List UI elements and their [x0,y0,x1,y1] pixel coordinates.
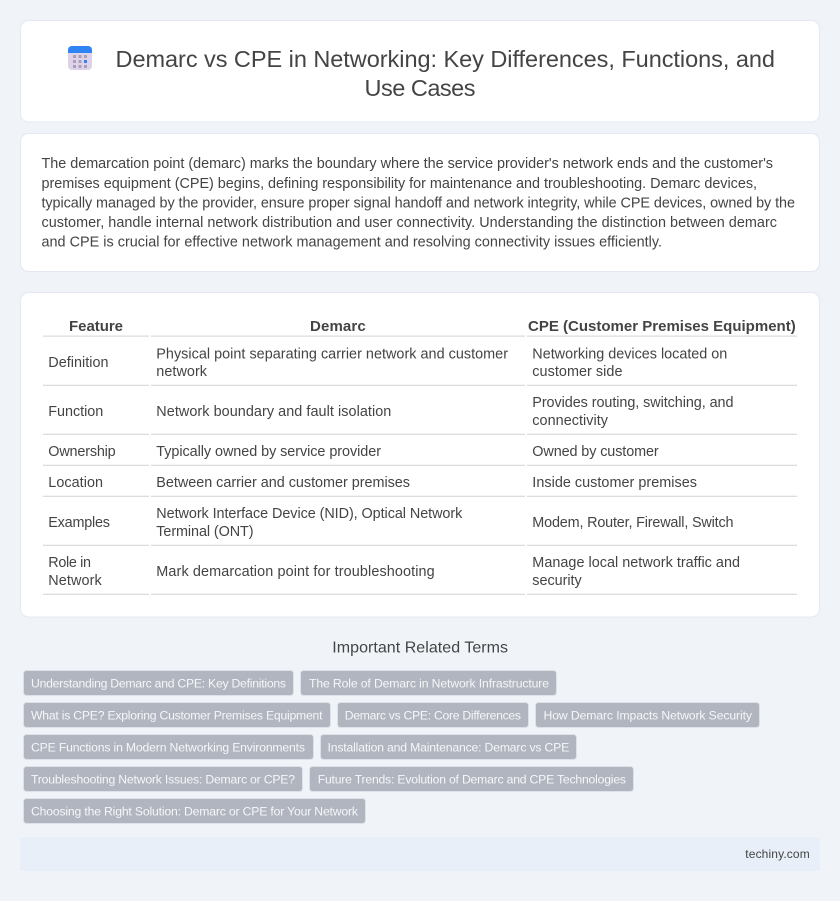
title [116,46,775,101]
table row: definition: network [156,364,208,380]
title: Demarc vs CPE in Networking: Key Differences, Functions, and [116,46,775,72]
table header row: Demarc [310,318,366,335]
table row: examples: Modem, Router, Firewall, Switch [532,515,734,531]
intro paragraph [42,156,795,250]
intro paragraph: The demarcation point (demarc) marks the boundary where the service provider's network ends and the customer's [42,156,773,172]
chip [24,670,294,696]
chip: The Role of Demarc in Network Infrastructure [309,676,549,690]
table row: location [43,475,797,497]
table row: function: Function [48,404,103,420]
table row: ownership: Typically owned by service provider [156,444,381,460]
footer bar: techiny.com [745,847,810,861]
chip [338,702,528,728]
table row: role in network: Manage local network traffic and [532,555,740,571]
chip [24,702,330,728]
chip [24,734,314,760]
chip [24,766,302,792]
panel: comparison table [20,292,820,617]
chip: Installation and Maintenance: Demarc vs CPE [328,740,569,754]
intro paragraph: and CPE is crucial for effective network management and resolving connectivity issues efficiently. [42,234,662,250]
chip: How Demarc Impacts Network Security [544,708,753,722]
icon: calendar [68,46,92,70]
table row: role in network: Mark demarcation point for troubleshooting [156,564,435,580]
table row: definition: customer side [532,364,622,380]
table row: function: Provides routing, switching, and [532,395,734,411]
intro paragraph: customer, handle internal network distribution and user connectivity. Understanding the distinction between demarc [42,215,777,231]
title: Use Cases [364,75,476,101]
table row: function [43,395,797,435]
panel: title card [20,20,820,122]
table row: role in network [43,555,797,595]
table row: examples: Examples [48,515,110,531]
table row: examples: Network Interface Device (NID), Optical Network [156,506,463,522]
intro paragraph: typically managed by the provider, ensure proper signal handoff and network integrity, while CPE devices, owned by the [42,196,795,212]
chip: Demarc vs CPE: Core Differences [345,708,521,722]
chip [536,702,760,728]
chip [310,766,634,792]
table header row: CPE (Customer Premises Equipment) [528,318,796,335]
chip [24,798,366,824]
table row: role in network: security [532,573,582,589]
related terms chips [24,670,760,824]
table row: function: Network boundary and fault isolation [156,404,391,420]
table row: definition: Definition [48,355,108,371]
table row: ownership: Owned by customer [532,444,659,460]
table row: function: connectivity [532,413,609,429]
table row: definition [43,346,797,386]
table row: examples [43,506,797,546]
intro paragraph: premises equipment (CPE) begins, defining responsibility for maintenance and troubleshooting. Demarc devices, [42,176,757,192]
chip: Choosing the Right Solution: Demarc or CPE for Your Network [31,804,359,818]
chip: Future Trends: Evolution of Demarc and CPE Technologies [318,772,626,786]
table row: location: Between carrier and customer premises [156,475,410,491]
table row: location: Inside customer premises [532,475,697,491]
chip: What is CPE? Exploring Customer Premises Equipment [31,708,323,722]
table header row [43,318,797,337]
chip: Troubleshooting Network Issues: Demarc or CPE? [31,772,295,786]
table row: role in network: Role in [48,555,91,571]
footer bar [20,837,820,871]
table header row: Feature [69,318,123,335]
heading: important related terms: Important Related Terms [332,640,508,657]
table row: role in network: Network [48,573,102,589]
table row: examples: Terminal (ONT) [156,524,254,540]
table row: ownership [43,444,797,466]
panel: intro text card [20,134,820,272]
table row: ownership: Ownership [48,444,116,460]
table row: definition: Networking devices located on [532,346,727,362]
table row: location: Location [48,475,103,491]
chip [320,734,576,760]
chip: CPE Functions in Modern Networking Environments [31,740,305,754]
table row: definition: Physical point separating carrier network and customer [156,346,508,362]
chip: Understanding Demarc and CPE: Key Definitions [31,676,286,690]
chip [300,670,556,696]
